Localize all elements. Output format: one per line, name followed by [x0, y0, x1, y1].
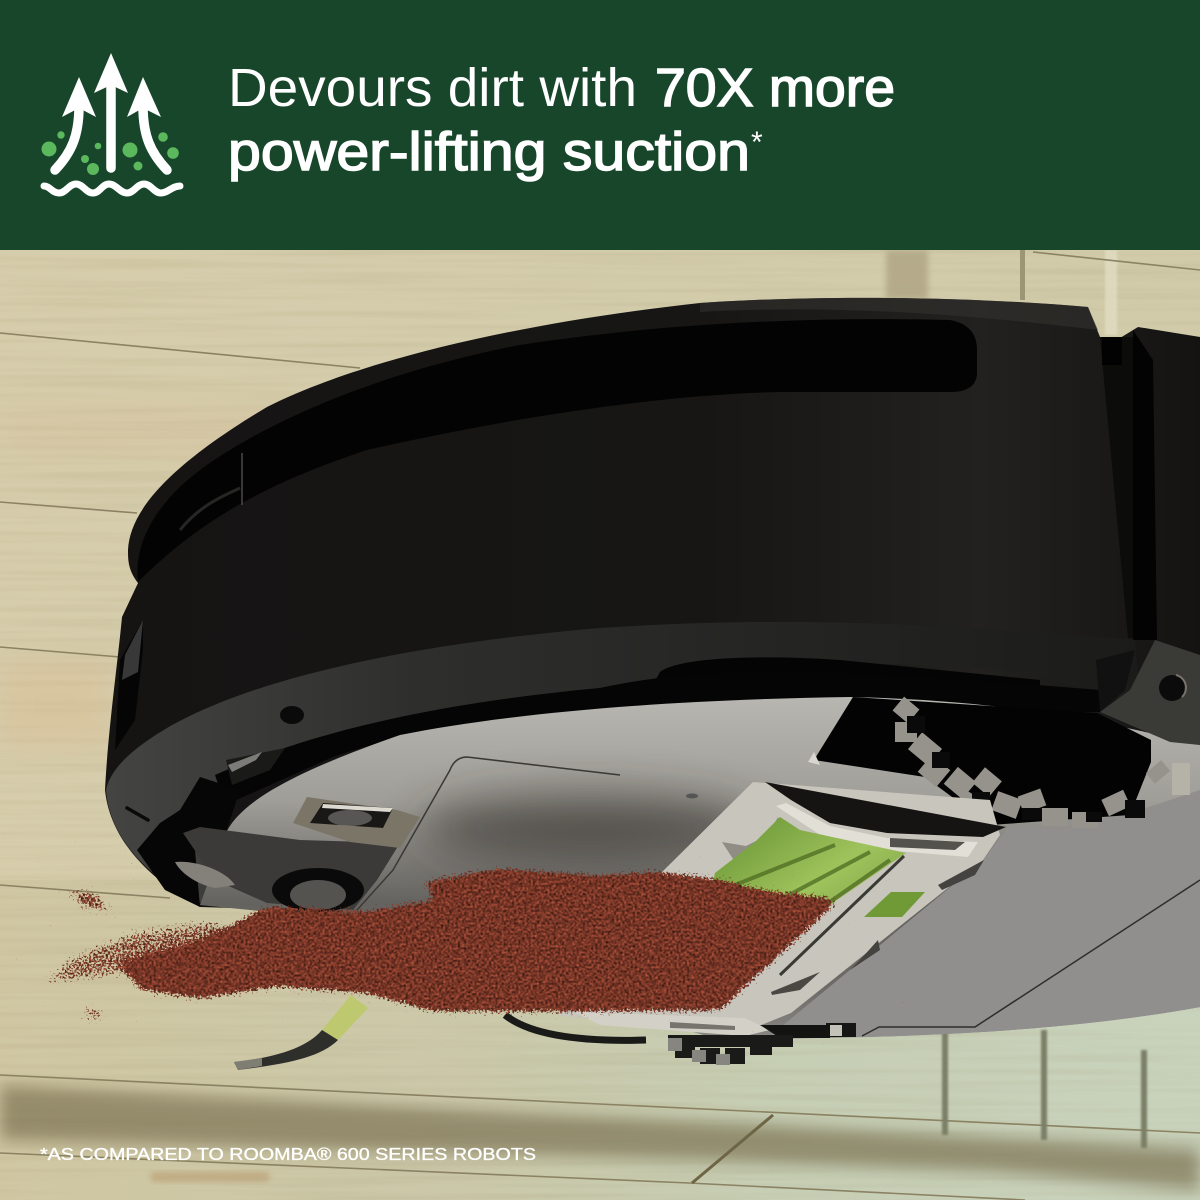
front caster and sensor: [137, 748, 420, 912]
robot underside plate: [200, 697, 1200, 1040]
side brush bristle: [234, 995, 368, 1070]
heading: Devours dirt with: [228, 58, 637, 118]
heading: *: [751, 126, 763, 159]
green brush chamber: [700, 817, 925, 975]
heading: 70X more: [655, 58, 895, 118]
right side underside wheel: [505, 1012, 856, 1065]
dirt being lifted: [42, 870, 837, 1021]
footnote: *AS COMPARED TO ROOMBA® 600 SERIES ROBOTS: [40, 1144, 536, 1164]
wheel well and right wheel: [808, 640, 1200, 828]
icon: suction arrows: [42, 53, 180, 193]
heading: [228, 58, 895, 182]
robot vacuum: [42, 298, 1200, 1070]
header banner: [0, 0, 1200, 250]
dust bin frame: [560, 782, 1006, 1030]
heading: power-lifting suction: [228, 122, 750, 182]
robot upper body: [105, 298, 1200, 910]
robot rim: [106, 622, 1140, 905]
floor and cabinet background: [0, 250, 1200, 1200]
